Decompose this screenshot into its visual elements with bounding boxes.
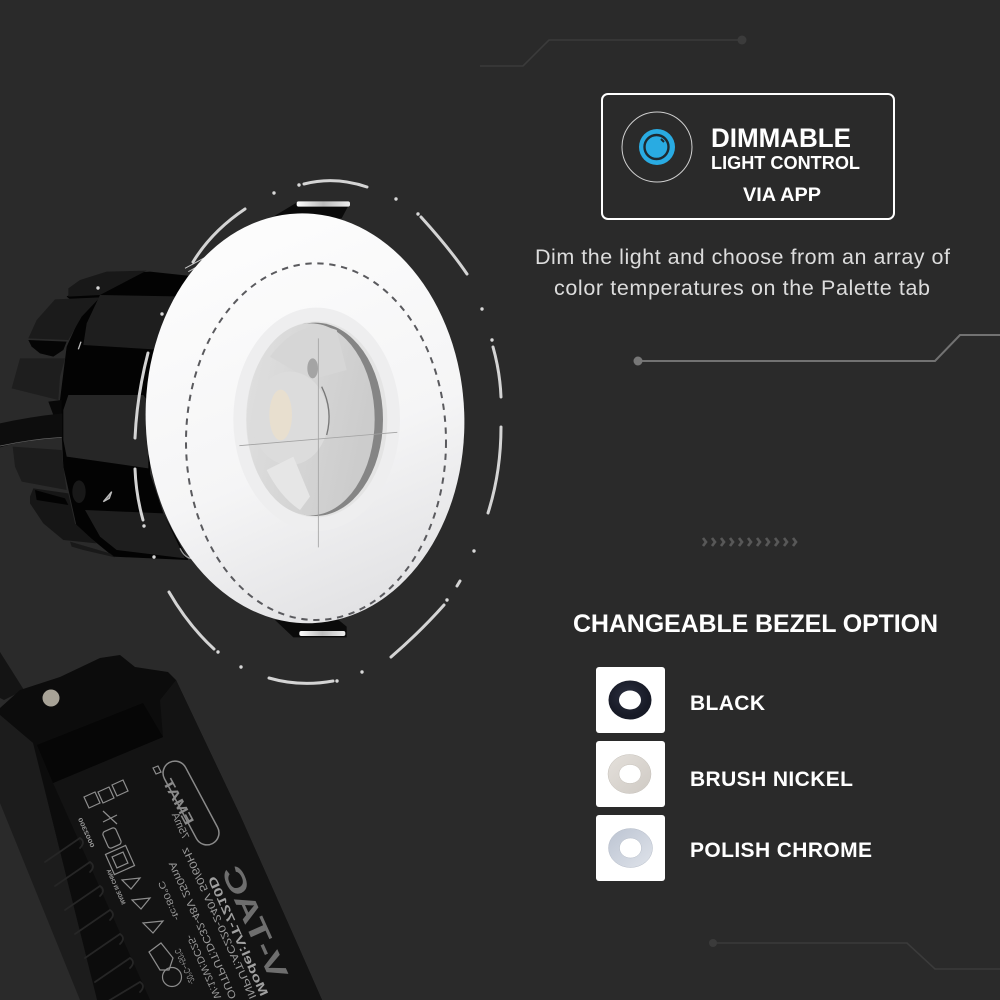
orbit dots [96,183,494,683]
lower panel [85,510,185,558]
lens dark ring [248,323,383,516]
center panel [63,395,148,468]
badge heading: DIMMABLE [711,123,851,153]
decorative circuit line: top [480,36,746,66]
section heading: CHANGEABLE BEZEL OPTION [573,610,938,638]
black bezel ring [608,681,652,720]
crosshair [239,338,397,547]
arc: top right [421,217,467,274]
disc face [139,208,471,629]
driver cable [0,652,24,700]
cable socket [48,400,62,417]
fin one underside [28,340,67,357]
swatch card [596,815,665,881]
arc: right [493,347,501,397]
description line one: Dim the light and choose from an array of [535,245,950,269]
lamp housing [0,271,200,560]
driver ambient temperature text: -20°C~+50°C [172,947,197,986]
bottom foot [70,542,115,557]
bezel option: brush nickel [596,741,853,807]
arc: top left [193,209,245,262]
fin two [12,358,65,400]
lens outer rim [246,321,387,517]
driver body [0,655,322,1000]
driver screw [42,690,60,706]
cable highlight [0,437,62,446]
upper left clip wire [185,247,227,272]
bezel option: black [596,667,765,733]
driver brand oval: EMAT [160,775,197,827]
decorative circuit line: middle [634,335,1000,366]
option label: BRUSH NICKEL [690,768,853,791]
housing gloss marks [78,286,186,502]
driver side ribs [45,838,143,1000]
bezel option: polish chrome [596,815,872,881]
arc: top [304,181,367,187]
driver side face [0,715,97,1000]
lower left clip [180,548,192,558]
bottom clip chrome [299,631,345,636]
arc: right lower [488,427,501,513]
lens glass [247,323,375,515]
driver output text two: W:12W:DC25- [184,933,222,1000]
lens screw [307,358,318,378]
arc: bottom right [391,605,444,657]
driver code text: 0002300 [76,816,95,849]
top clip arm [265,203,350,222]
arc: bottom [269,678,333,683]
swatch card [596,741,665,807]
arc: small lower right [457,581,460,586]
swatch card [596,667,665,733]
badge via app: VIA APP [743,185,821,206]
dashed ring [186,263,446,620]
inner arc [322,387,329,435]
glossy black body [60,272,200,560]
description text [535,245,950,300]
driver logo: V-TAC [216,861,294,984]
driver recess [37,703,163,783]
chrome bezel ring [608,828,652,868]
driver input text: INPUT:AC220-240V 50/60Hz [179,846,257,1000]
fin one [28,297,100,340]
driver input current text: 75mA [169,811,190,841]
driver certification marks [84,766,182,986]
spring clips [180,201,350,637]
option label: POLISH CHROME [690,839,872,862]
top clip chrome [297,201,350,207]
lens surround glow [233,308,400,531]
feature badge: dimmable light control [602,94,894,219]
driver label face [53,680,322,1000]
decorative circuit line: bottom [709,939,1000,969]
chevron row divider [703,538,796,546]
arc: bottom left [169,592,214,649]
driver brand oval [159,757,223,849]
housing hole [72,480,86,503]
lens top facet [270,327,347,380]
LED driver box [0,652,322,1000]
fin three [13,447,67,490]
fin four slot [35,490,68,505]
driver temperature text: -tc:80°C [156,879,182,922]
badge subheading: LIGHT CONTROL [711,153,860,173]
option label: BLACK [690,692,765,715]
white bezel disc [139,208,471,629]
arc: left lower [135,469,143,520]
top cap [68,271,147,297]
nickel bezel ring [608,754,651,794]
arc: left [135,353,148,438]
lens lower facets [267,457,310,510]
driver made in china text: MADE IN CHINA [104,868,126,906]
orbit arcs and dots around lamp [96,181,501,683]
cable [0,413,62,447]
icon: app dial [622,112,692,182]
bottom clip arm [275,618,347,637]
upper panel [83,295,190,350]
fin four [30,488,97,543]
warm LED [269,390,292,440]
driver model text: Model:VT-7210D [205,874,271,998]
badge frame [602,94,894,219]
lens reflector [252,372,328,465]
description line two: color temperatures on the Palette tab [554,276,930,300]
driver output text: OUTPUT:DC32-48V 250mA [166,860,237,1000]
